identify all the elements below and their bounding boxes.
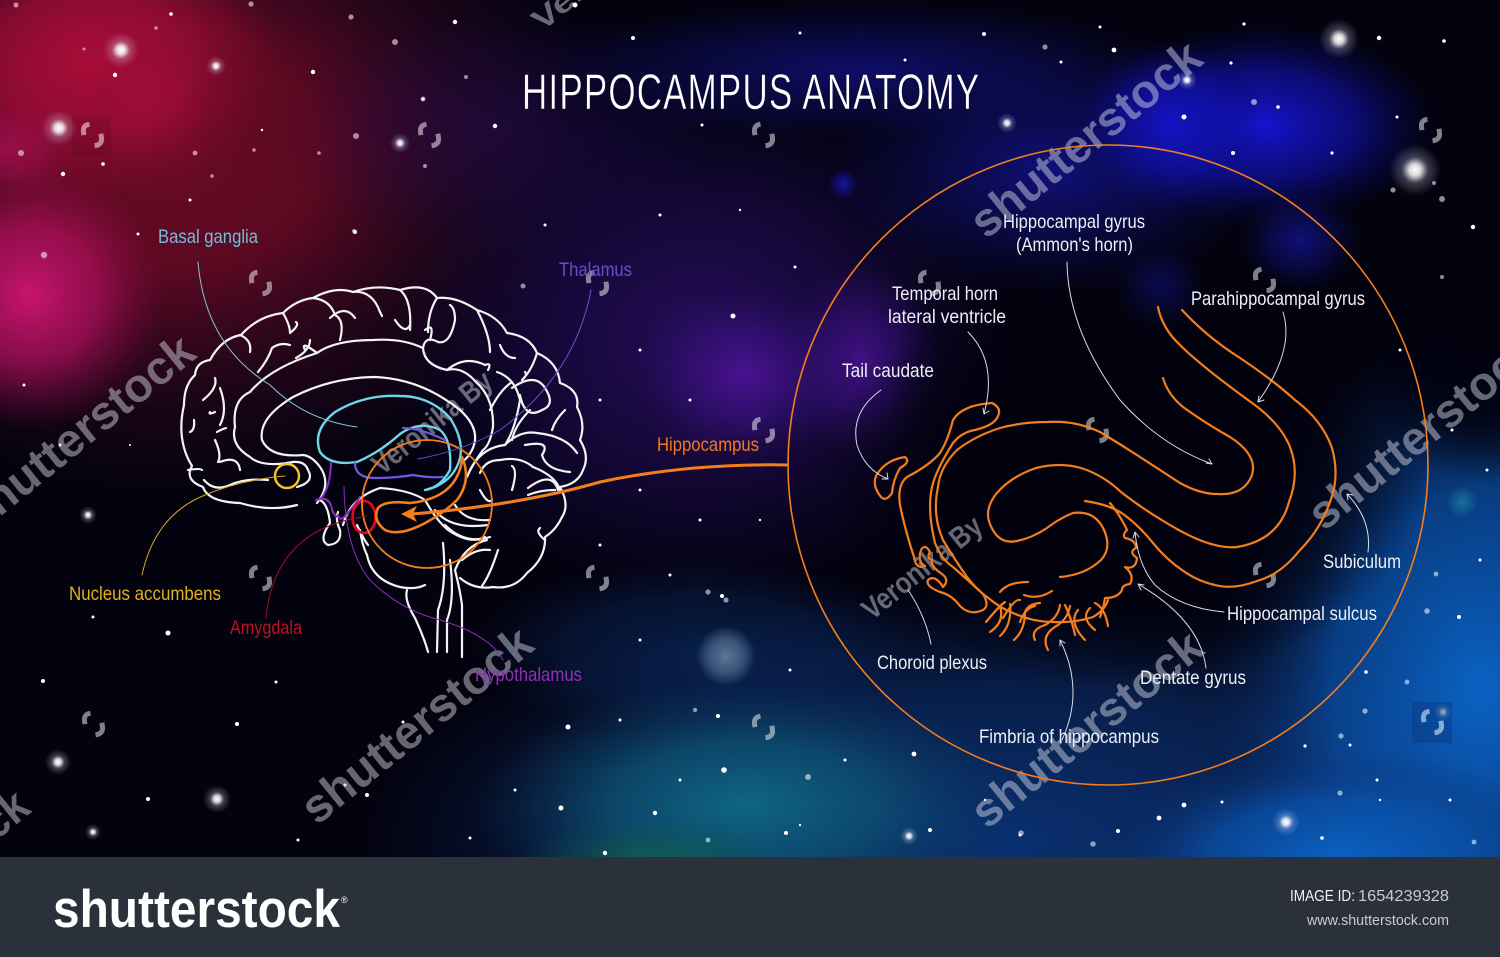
labels: magnified panel: Subiculum <box>1323 551 1401 573</box>
nucleus accumbens ring <box>275 464 299 488</box>
labels: magnified panel <box>842 211 1401 748</box>
labels: magnified panel: (Ammon's horn) <box>1016 234 1133 256</box>
labels: magnified panel: Hippocampal gyrus <box>1003 211 1145 233</box>
low frontal folds <box>188 420 268 488</box>
watermark: logo marks <box>72 116 1452 743</box>
labels: magnified panel: Dentate gyrus <box>1140 667 1246 689</box>
labels: left brain: Nucleus accumbens <box>69 583 221 605</box>
hippocampus circle <box>362 440 492 568</box>
hippocampal curves <box>875 307 1336 650</box>
labels: magnified panel: Choroid plexus <box>877 652 987 674</box>
registered mark: ® <box>341 895 348 905</box>
labels: left brain: Thalamus <box>559 259 632 281</box>
magnified circle panel <box>788 145 1428 785</box>
pituitary <box>320 500 340 545</box>
labels: magnified panel: Fimbria of hippocampus <box>979 726 1159 748</box>
amygdala ring <box>352 501 376 533</box>
frontal and parietal folds <box>234 340 493 487</box>
leader: nucleus accumbens <box>142 476 285 575</box>
leader: amygdala <box>266 516 367 618</box>
watermark: shutterstock repeated: Veronika By <box>366 364 499 481</box>
labels: magnified panel: Tail caudate <box>842 360 934 382</box>
cerebellum <box>435 432 577 586</box>
footer bar <box>0 857 1500 957</box>
arrow: hippocampus connection <box>401 465 788 522</box>
brain outline <box>181 287 586 657</box>
labels: magnified panel: Parahippocampal gyrus <box>1191 288 1365 310</box>
labels: left brain: Hippocampus <box>657 434 759 456</box>
panel circle outline <box>788 145 1428 785</box>
thalamus shape <box>355 428 445 478</box>
image id: IMAGE ID: <box>1290 888 1355 905</box>
watermark: shutterstock repeated: shutterstock <box>290 615 543 834</box>
labels: magnified panel: Temporal horn <box>892 283 998 305</box>
title: HIPPOCAMPUS ANATOMY <box>522 65 979 121</box>
hippocampus highlight <box>376 457 466 532</box>
site url: www.shutterstock.com <box>1306 912 1449 929</box>
labels: left brain <box>69 226 759 686</box>
labels: magnified panel: lateral ventricle <box>888 306 1006 328</box>
white leaders with arrows <box>856 262 1369 740</box>
labels: left brain: Amygdala <box>230 617 302 639</box>
pons and brainstem <box>343 488 490 657</box>
hypothalamus shape <box>316 463 360 519</box>
labels: left brain: Hypothalamus <box>475 664 582 686</box>
brain diagram <box>142 262 591 660</box>
basal ganglia shape <box>318 396 461 490</box>
leader: basal ganglia <box>198 262 357 427</box>
footer logo: shutterstock <box>53 880 340 939</box>
leader: thalamus <box>418 290 591 459</box>
labels: magnified panel: Hippocampal sulcus <box>1227 603 1377 625</box>
leader: hypothalamus <box>344 486 503 660</box>
image id number: 1654239328 <box>1358 888 1449 905</box>
watermark: shutterstock repeated: Veronika By <box>856 509 989 626</box>
labels: left brain: Basal ganglia <box>158 226 258 248</box>
watermark: shutterstock repeated: shutterstock <box>959 29 1212 248</box>
watermark: shutterstock repeated: shutterstock <box>960 619 1213 838</box>
